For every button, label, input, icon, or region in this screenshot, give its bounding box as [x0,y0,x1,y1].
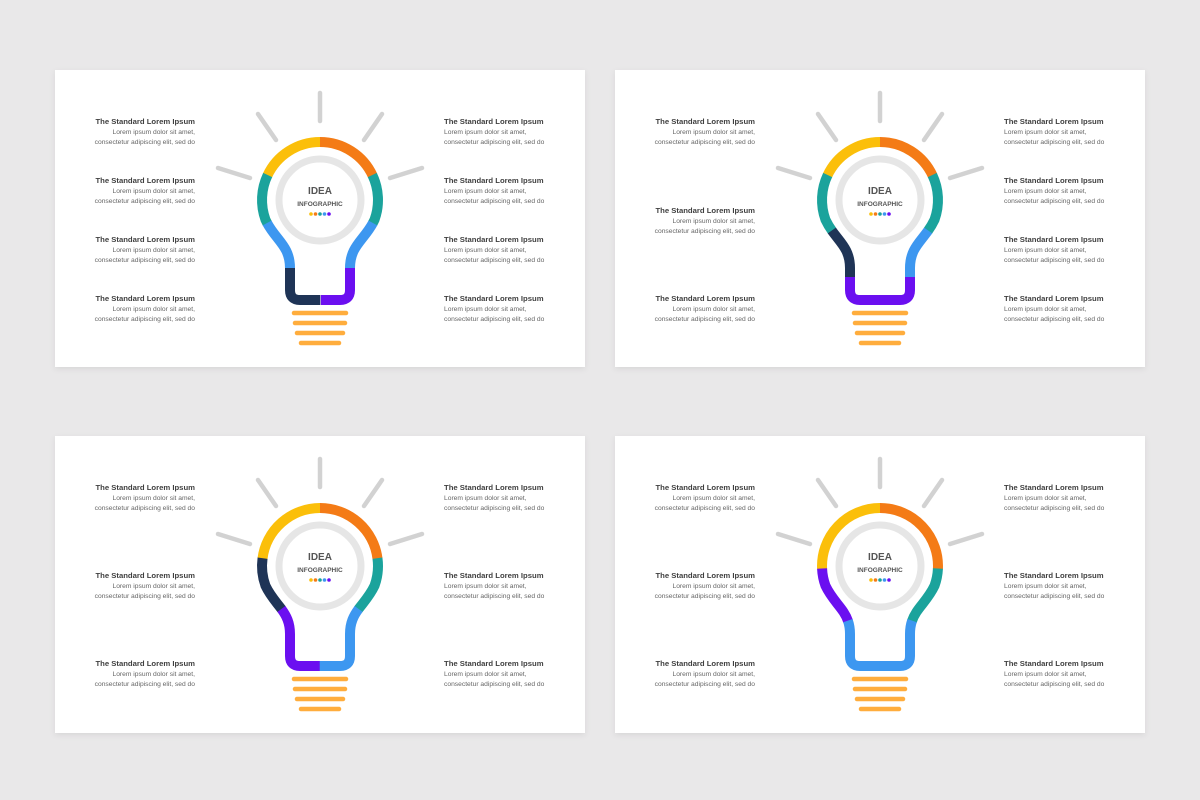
text blocks right 1: Lorem ipsum dolor sit amet, [444,129,527,136]
text blocks right 3: consectetur adipiscing elit, sed do [444,681,545,688]
text blocks right 2: The Standard Lorem Ipsum [1004,117,1104,126]
text blocks right 2: consectetur adipiscing elit, sed do [1004,316,1105,323]
text blocks right 1: Lorem ipsum dolor sit amet, [444,306,527,313]
text blocks left 4: Lorem ipsum dolor sit amet, [672,671,755,678]
panel 4 [615,436,1145,733]
text blocks right 2: The Standard Lorem Ipsum [1004,176,1104,185]
text blocks left 3: The Standard Lorem Ipsum [95,659,195,668]
text blocks left 2: consectetur adipiscing elit, sed do [655,228,755,235]
text blocks right 3: The Standard Lorem Ipsum [444,483,544,492]
text blocks left 2: Lorem ipsum dolor sit amet, [672,218,755,225]
text blocks right 1: consectetur adipiscing elit, sed do [444,316,545,323]
text blocks right 3: Lorem ipsum dolor sit amet, [444,495,527,502]
text blocks left 2 [655,117,755,323]
text blocks right 4: Lorem ipsum dolor sit amet, [1004,671,1087,678]
text blocks left 1: consectetur adipiscing elit, sed do [95,139,195,146]
text blocks right 2: The Standard Lorem Ipsum [1004,294,1104,303]
text blocks right 4: The Standard Lorem Ipsum [1004,571,1104,580]
text blocks left 1: consectetur adipiscing elit, sed do [95,198,195,205]
text blocks right 3: The Standard Lorem Ipsum [444,659,544,668]
text blocks left 2: The Standard Lorem Ipsum [655,206,755,215]
text blocks right 4: consectetur adipiscing elit, sed do [1004,593,1105,600]
text blocks right 3: Lorem ipsum dolor sit amet, [444,583,527,590]
text blocks left 2: The Standard Lorem Ipsum [655,294,755,303]
text blocks right 1: The Standard Lorem Ipsum [444,235,544,244]
text blocks right 4: consectetur adipiscing elit, sed do [1004,681,1105,688]
text blocks right 3 [444,483,545,688]
bulb 4 [778,459,982,709]
text blocks left 1: consectetur adipiscing elit, sed do [95,257,195,264]
text blocks left 4: Lorem ipsum dolor sit amet, [672,495,755,502]
text blocks left 4: The Standard Lorem Ipsum [655,483,755,492]
bulb 2 [778,93,982,343]
text blocks left 4: consectetur adipiscing elit, sed do [655,505,755,512]
text blocks right 1: consectetur adipiscing elit, sed do [444,198,545,205]
text blocks right 1: Lorem ipsum dolor sit amet, [444,188,527,195]
text blocks right 2 [1004,117,1105,323]
text blocks right 1: consectetur adipiscing elit, sed do [444,139,545,146]
text blocks right 2: Lorem ipsum dolor sit amet, [1004,188,1087,195]
text blocks right 2: Lorem ipsum dolor sit amet, [1004,306,1087,313]
text blocks left 4: The Standard Lorem Ipsum [655,571,755,580]
text blocks left 4: Lorem ipsum dolor sit amet, [672,583,755,590]
text blocks right 2: The Standard Lorem Ipsum [1004,235,1104,244]
text blocks left 1: The Standard Lorem Ipsum [95,117,195,126]
text blocks left 1: Lorem ipsum dolor sit amet, [112,129,195,136]
text blocks right 4 [1004,483,1105,688]
text blocks right 3: consectetur adipiscing elit, sed do [444,505,545,512]
text blocks right 4: The Standard Lorem Ipsum [1004,659,1104,668]
text blocks right 3: The Standard Lorem Ipsum [444,571,544,580]
text blocks left 3: Lorem ipsum dolor sit amet, [112,671,195,678]
text blocks left 4: consectetur adipiscing elit, sed do [655,593,755,600]
text blocks right 3: consectetur adipiscing elit, sed do [444,593,545,600]
text blocks right 2: consectetur adipiscing elit, sed do [1004,257,1105,264]
text blocks left 2: Lorem ipsum dolor sit amet, [672,129,755,136]
text blocks left 2: consectetur adipiscing elit, sed do [655,139,755,146]
text blocks left 3: The Standard Lorem Ipsum [95,571,195,580]
text blocks left 1: The Standard Lorem Ipsum [95,294,195,303]
text blocks left 3: consectetur adipiscing elit, sed do [95,681,195,688]
text blocks left 1: Lorem ipsum dolor sit amet, [112,188,195,195]
text blocks left 1: Lorem ipsum dolor sit amet, [112,306,195,313]
text blocks right 3: Lorem ipsum dolor sit amet, [444,671,527,678]
text blocks right 2: consectetur adipiscing elit, sed do [1004,198,1105,205]
text blocks left 1: The Standard Lorem Ipsum [95,176,195,185]
panel 2 [615,70,1145,367]
text blocks left 3: consectetur adipiscing elit, sed do [95,505,195,512]
text blocks left 1: consectetur adipiscing elit, sed do [95,316,195,323]
text blocks left 2: The Standard Lorem Ipsum [655,117,755,126]
panel 1 [55,70,585,367]
text blocks left 1: Lorem ipsum dolor sit amet, [112,247,195,254]
text blocks left 4: consectetur adipiscing elit, sed do [655,681,755,688]
text blocks left 2: Lorem ipsum dolor sit amet, [672,306,755,313]
bulb 3 [218,459,422,709]
bulb 1 [218,93,422,343]
text blocks right 1: Lorem ipsum dolor sit amet, [444,247,527,254]
text blocks right 4: consectetur adipiscing elit, sed do [1004,505,1105,512]
text blocks left 3: Lorem ipsum dolor sit amet, [112,583,195,590]
text blocks left 3: The Standard Lorem Ipsum [95,483,195,492]
text blocks right 2: consectetur adipiscing elit, sed do [1004,139,1105,146]
text blocks right 4: The Standard Lorem Ipsum [1004,483,1104,492]
text blocks right 1: The Standard Lorem Ipsum [444,117,544,126]
text blocks left 1: The Standard Lorem Ipsum [95,235,195,244]
text blocks right 4: Lorem ipsum dolor sit amet, [1004,495,1087,502]
text blocks left 4 [655,483,755,688]
text blocks right 1: consectetur adipiscing elit, sed do [444,257,545,264]
text blocks left 2: consectetur adipiscing elit, sed do [655,316,755,323]
text blocks left 3: consectetur adipiscing elit, sed do [95,593,195,600]
text blocks left 4: The Standard Lorem Ipsum [655,659,755,668]
panel 3 [55,436,585,733]
text blocks right 4: Lorem ipsum dolor sit amet, [1004,583,1087,590]
text blocks right 1 [444,117,545,323]
text blocks right 2: Lorem ipsum dolor sit amet, [1004,247,1087,254]
text blocks left 3 [95,483,195,688]
text blocks right 1: The Standard Lorem Ipsum [444,294,544,303]
text blocks right 2: Lorem ipsum dolor sit amet, [1004,129,1087,136]
text blocks left 1 [95,117,195,323]
text blocks right 1: The Standard Lorem Ipsum [444,176,544,185]
text blocks left 3: Lorem ipsum dolor sit amet, [112,495,195,502]
